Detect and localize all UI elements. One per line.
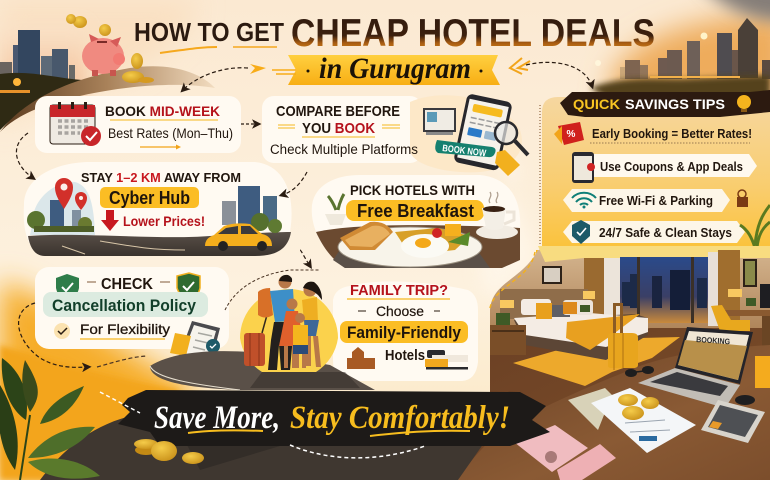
pill: cancellation policy: Cancellation Policy	[52, 296, 196, 315]
wall pictures	[542, 259, 757, 287]
rug	[513, 337, 680, 386]
icon: coffee cup	[476, 192, 518, 239]
arrow: check to road	[19, 303, 88, 367]
tip: early booking: %	[567, 129, 576, 140]
slogan: save more: Save More,	[154, 400, 280, 436]
icon: price tag	[495, 150, 520, 176]
text: check multiple platforms: Check Multiple Platforms	[270, 142, 418, 157]
tip: wifi and parking	[563, 189, 748, 212]
boy	[293, 313, 308, 368]
illustration: family with luggage	[240, 275, 360, 388]
header: quick savings tips: QUICK	[573, 96, 620, 112]
suitcase	[244, 315, 267, 366]
icon: down arrow	[101, 210, 119, 231]
button: book now: BOOK NOW	[442, 143, 487, 159]
pill: free breakfast: Free Breakfast	[357, 201, 474, 221]
icon: magnifier	[495, 122, 528, 155]
heading: family trip: FAMILY TRIP?	[350, 283, 448, 299]
panel: check cancellation policy	[35, 267, 229, 349]
arrow: dashed connector	[97, 356, 147, 367]
connector: yellow room edge	[490, 252, 535, 308]
calculator	[701, 395, 765, 443]
buildings right	[222, 186, 282, 233]
woman	[302, 282, 322, 367]
lamps and nightstands	[490, 289, 742, 355]
icon: check circle	[54, 323, 70, 339]
desk and chair	[711, 284, 770, 346]
rupee notes	[514, 425, 616, 480]
shadows	[250, 372, 360, 388]
scene: bottom road	[40, 402, 500, 480]
girl	[279, 298, 304, 368]
panel: compare before you book: YOU BOOK	[302, 120, 375, 137]
room wall	[490, 250, 770, 345]
heading: compare before you book: COMPARE BEFORE	[276, 103, 400, 120]
bed	[500, 289, 648, 360]
tip: early booking	[554, 122, 752, 145]
scene: right city skyline	[590, 0, 770, 100]
text: lower prices: Lower Prices!	[123, 213, 205, 229]
text: hotels: Hotels	[385, 348, 425, 364]
text: best rates: Best Rates (Mon–Thu)	[108, 125, 233, 141]
road	[28, 232, 291, 256]
heading: stay 1-2 km away from: STAY 1–2 KM AWAY FROM	[81, 170, 241, 185]
slogan: stay comfortably: Stay Comfortably!	[290, 400, 510, 436]
slogan brush band	[118, 390, 550, 446]
suitcase	[608, 303, 638, 370]
scene: left city skyline and hill	[0, 25, 215, 132]
arrow: title to book mid-week	[183, 68, 248, 90]
buildings left	[27, 200, 94, 232]
header: quick savings tips: SAVINGS TIPS	[625, 96, 725, 112]
icon: taxi	[205, 223, 272, 251]
arrow: mid-week to compare	[241, 123, 258, 125]
title	[134, 12, 655, 55]
table surface	[316, 225, 520, 268]
heading: pick hotels with: PICK HOTELS WITH	[350, 182, 475, 198]
icon: hotel building	[347, 347, 375, 369]
illustration: family road	[150, 351, 375, 390]
button: book now	[435, 140, 496, 159]
arrow: breakfast to family	[300, 250, 310, 266]
text: for flexibility: For Flexibility	[80, 321, 170, 337]
laptop booking	[638, 327, 753, 408]
window with night city view	[620, 257, 710, 323]
connector: check to family	[225, 270, 320, 310]
plate of breakfast	[338, 222, 482, 267]
icon: bed	[425, 350, 468, 370]
icon: plant	[325, 194, 346, 225]
tip: safe and clean stays: 24/7 Safe & Clean Stays	[599, 225, 732, 240]
man	[258, 275, 295, 370]
icon: desktop monitor	[423, 108, 456, 135]
tip: safe and clean stays	[563, 205, 770, 248]
tip: early booking: Early Booking = Better Rates!	[592, 126, 752, 141]
table surface	[458, 345, 770, 480]
panel: stay near cyber hub	[24, 162, 292, 256]
text: choose: Choose	[376, 303, 424, 319]
sunglasses	[625, 366, 654, 377]
pill: cyber hub: Cyber Hub	[109, 188, 190, 208]
arrow: banner to tips	[526, 62, 592, 86]
heading: book mid-week: BOOK MID-WEEK	[105, 103, 220, 119]
scene: left city dome	[30, 182, 95, 235]
juice glass	[755, 356, 770, 388]
header: quick savings tips	[560, 90, 770, 117]
tip: wifi and parking: Free Wi-Fi & Parking	[599, 193, 713, 208]
panel: book mid-week	[35, 96, 241, 153]
icon: calendar	[50, 102, 101, 146]
banner: in Gurugram	[250, 52, 530, 85]
tip: coupons and app deals	[572, 152, 757, 183]
panel: compare before you book	[262, 93, 528, 176]
illustration: plant leaves	[0, 358, 100, 480]
icons: shields	[56, 273, 200, 302]
banner: in Gurugram: in Gurugram	[319, 52, 471, 85]
floor	[458, 328, 770, 480]
icon: coins on road	[134, 439, 204, 464]
heading: how to get: HOW TO GET	[134, 17, 284, 47]
scene: hotel room	[458, 246, 770, 480]
icon: piggy bank with coins	[66, 14, 154, 83]
curtains	[584, 250, 740, 330]
panel: quick savings tips	[536, 90, 770, 262]
pill: family-friendly: Family-Friendly	[347, 323, 461, 342]
panel: family friendly hotels	[333, 281, 478, 381]
arrow: mid-week to cyber hub	[16, 133, 33, 178]
icon: location pins	[55, 178, 87, 210]
tip: coupons and app deals: Use Coupons & App Deals	[600, 159, 743, 174]
panel: pick hotels with free breakfast	[312, 175, 520, 268]
road dashes	[100, 392, 425, 458]
documents and coins	[568, 388, 696, 453]
icon: phone	[453, 93, 513, 171]
heading: check: CHECK	[101, 276, 154, 293]
arrow: compare to cyber hub	[282, 172, 307, 195]
icon: clipboard	[170, 321, 220, 367]
heading: cheap hotel deals: CHEAP HOTEL DEALS	[291, 12, 655, 55]
sun circle	[240, 289, 338, 372]
laptop booking: BOOKING	[696, 335, 730, 346]
illustration: comparison blob	[410, 95, 522, 172]
